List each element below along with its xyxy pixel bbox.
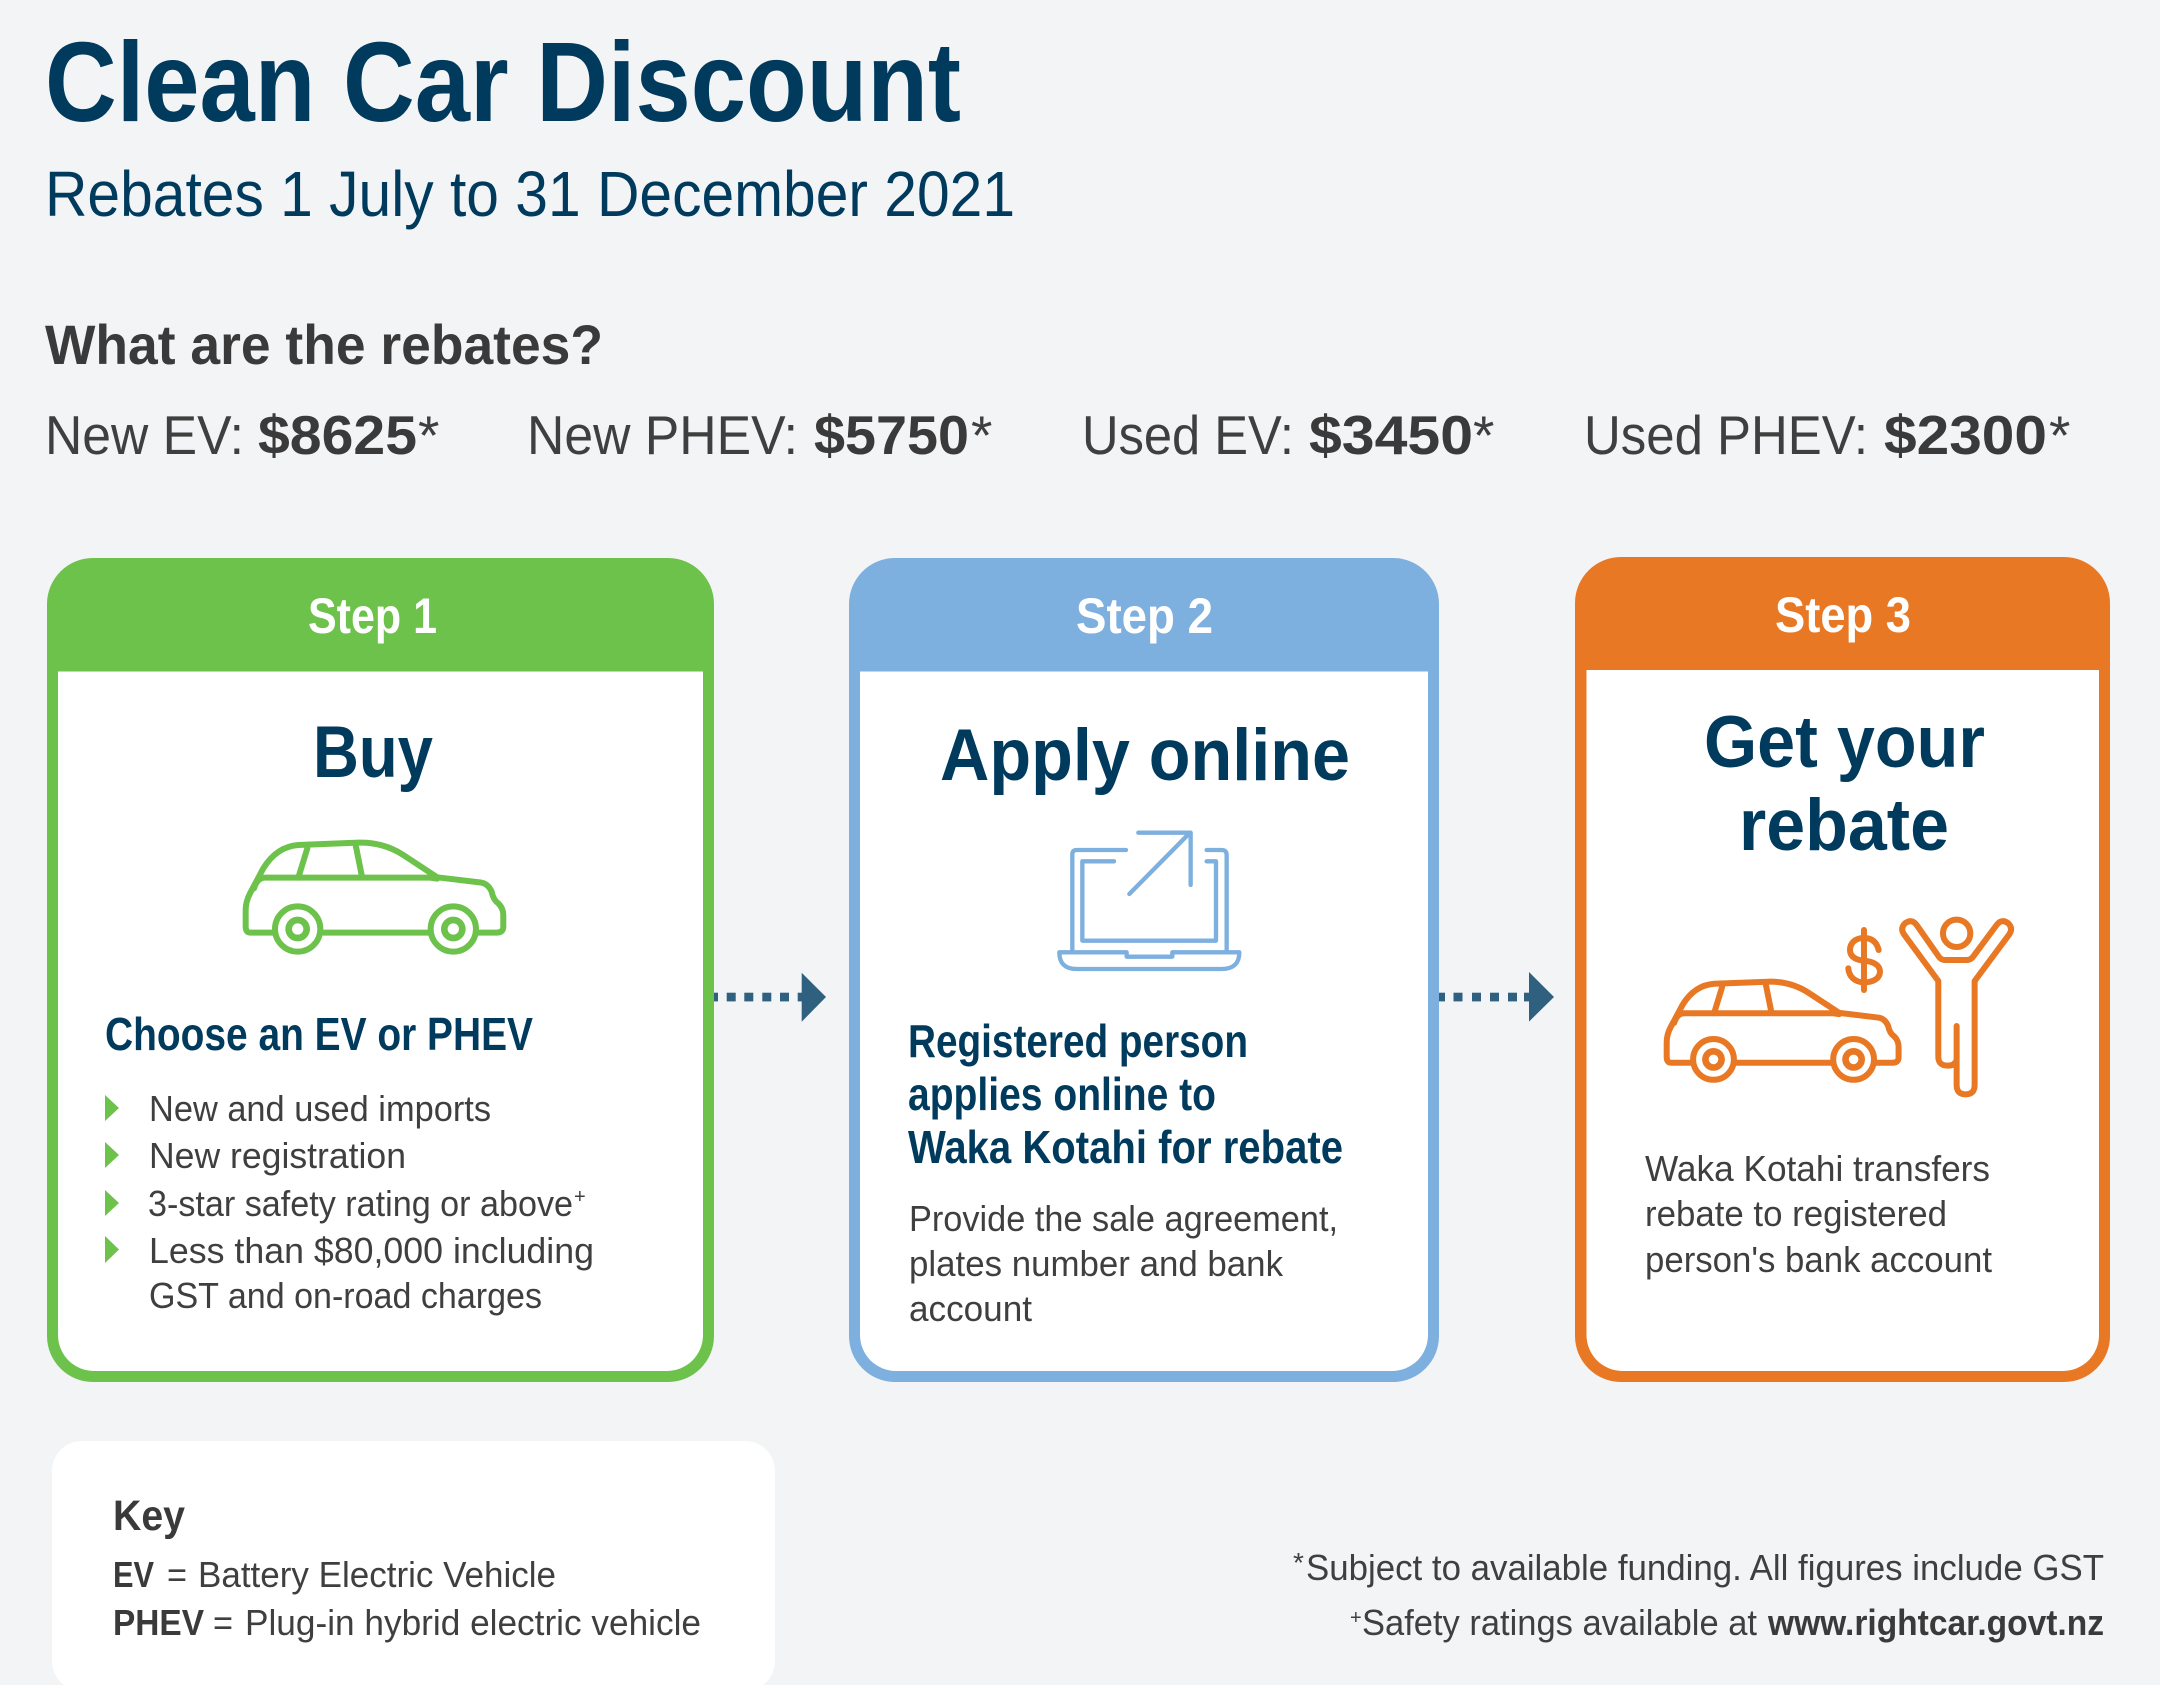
key: EV definition: EV <box>113 1554 154 1595</box>
heading: get your rebate: Get your <box>1704 702 1985 783</box>
panel: step 3 get your rebate <box>1575 557 2110 1382</box>
heading: buy: Buy <box>313 712 433 793</box>
key: PHEV definition: Plug-in hybrid electric vehicle <box>245 1602 701 1643</box>
rebate: used EV: $3450 <box>1309 404 1473 466</box>
body text: provide documents: account <box>909 1288 1032 1329</box>
rebate: used EV <box>1082 404 1494 466</box>
body text: provide documents: plates number and bank <box>909 1243 1284 1284</box>
key: EV definition: = <box>167 1554 187 1595</box>
footnote: safety ratings <box>1350 1602 2104 1643</box>
heading: get your rebate: rebate <box>1739 785 1949 866</box>
panel: step 1 buy <box>47 558 714 1382</box>
footnote: funding: Subject to available funding. All figures include GST <box>1306 1547 2104 1588</box>
key heading: Key <box>113 1492 185 1540</box>
key: PHEV definition: PHEV <box>113 1602 204 1643</box>
rebate amounts row <box>45 404 2070 466</box>
footnote: safety ratings: + <box>1350 1607 1362 1629</box>
bullet list: eligibility: 3-star safety rating or above <box>148 1183 573 1224</box>
bullet list: eligibility: GST and on-road charges <box>149 1275 542 1316</box>
rebate: new EV <box>45 404 439 466</box>
title: Clean Car Discount <box>45 19 961 145</box>
subheading: registered person applies: Waka Kotahi for rebate <box>908 1121 1343 1173</box>
bullet list: eligibility: Less than $80,000 including <box>149 1230 594 1271</box>
step 3 label: Step 3 <box>1775 587 1911 643</box>
bullet list: eligibility: + <box>574 1186 586 1208</box>
rebate: used PHEV <box>1584 404 2070 466</box>
rebate: new PHEV: * <box>971 404 992 466</box>
icon: laptop with arrow <box>1059 833 1239 969</box>
rebate: used EV: Used EV: <box>1082 404 1294 466</box>
panel: key <box>52 1441 775 1685</box>
body text: transfer: Waka Kotahi transfers <box>1645 1148 1990 1189</box>
icon: car <box>1667 982 1899 1080</box>
footnote: safety ratings: www.rightcar.govt.nz <box>1767 1602 2104 1643</box>
footnote: safety ratings: Safety ratings available at <box>1362 1602 1757 1643</box>
subheading: registered person applies: applies online to <box>908 1068 1216 1120</box>
panel: step 2 apply online <box>849 558 1439 1382</box>
rebate: new EV: New EV: <box>45 404 244 466</box>
heading: get your rebate <box>1704 702 1985 866</box>
subheading: choose an EV or PHEV: Choose an EV or PHEV <box>105 1008 533 1060</box>
rebate: used EV: * <box>1473 404 1494 466</box>
rebate: new EV: $8625 <box>258 404 417 466</box>
heading: what are the rebates: What are the rebates? <box>45 313 603 376</box>
bullet list: eligibility <box>105 1088 594 1316</box>
body text: provide documents <box>909 1198 1338 1329</box>
rebate: new PHEV: New PHEV: <box>527 404 798 466</box>
rebate: used PHEV: Used PHEV: <box>1584 404 1868 466</box>
rebate: new PHEV <box>527 404 992 466</box>
step 2 label: Step 2 <box>1076 588 1213 644</box>
step 1 label: Step 1 <box>308 588 437 644</box>
icon: car <box>246 843 503 952</box>
icon: dollar sign <box>1848 930 1880 990</box>
subheading: registered person applies <box>908 1015 1343 1173</box>
bullet list: eligibility: New registration <box>149 1135 406 1176</box>
rebate: new PHEV: $5750 <box>814 404 969 466</box>
rebate: used PHEV: $2300 <box>1884 404 2047 466</box>
body text: transfer: rebate to registered <box>1645 1193 1947 1234</box>
icon: celebrating person <box>1902 920 2011 1094</box>
body text: transfer: person's bank account <box>1645 1239 1992 1280</box>
arrow: step 1 to step 2 <box>714 973 826 1022</box>
body text: transfer <box>1645 1148 1992 1280</box>
key: EV definition: Battery Electric Vehicle <box>198 1554 556 1595</box>
footnote: funding: * <box>1293 1547 1304 1578</box>
bullet list: eligibility: New and used imports <box>149 1088 491 1129</box>
key: PHEV definition: = <box>213 1602 233 1643</box>
rebate: used PHEV: * <box>2049 404 2070 466</box>
subtitle: Rebates 1 July to 31 December 2021 <box>45 158 1015 230</box>
rebate: new EV: * <box>418 404 439 466</box>
body text: provide documents: Provide the sale agreement, <box>909 1198 1338 1239</box>
subheading: registered person applies: Registered person <box>908 1015 1248 1067</box>
heading: apply online: Apply online <box>940 715 1350 796</box>
arrow: step 2 to step 3 <box>1439 972 1554 1022</box>
